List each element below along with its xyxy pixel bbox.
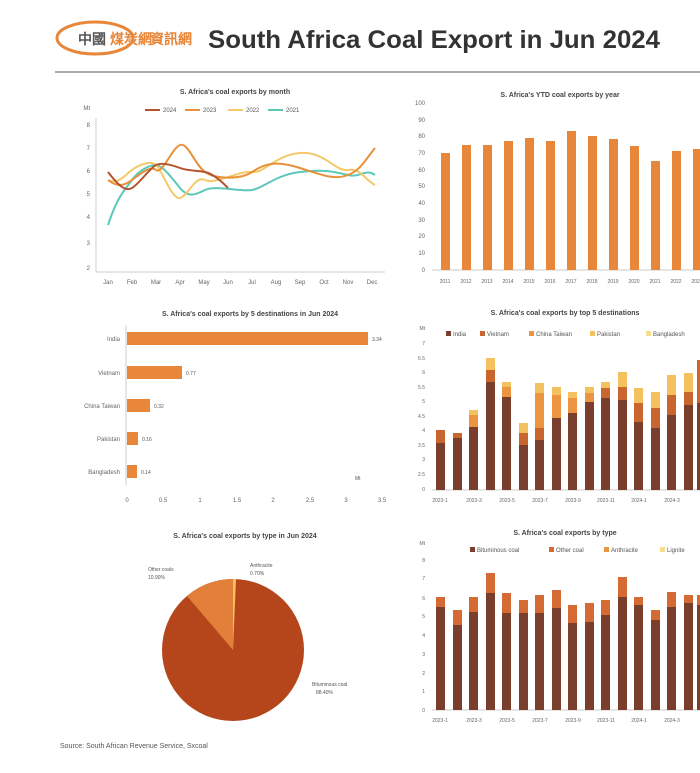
chart: top 5 destinations Jun 2024: 3.5 bbox=[378, 498, 387, 504]
chart: YTD by year: 80 bbox=[418, 134, 426, 140]
chart: top 5 destinations Jun 2024: 0.32 bbox=[154, 404, 164, 410]
logo bbox=[57, 22, 192, 54]
chart: line by month: 6 bbox=[87, 169, 91, 175]
chart: top 5 destinations Jun 2024 bbox=[84, 311, 387, 504]
chart: line by month: 2024 bbox=[163, 108, 177, 114]
logo: 煤炭網 bbox=[110, 31, 152, 47]
chart: top 5 destinations stacked: Bangladesh bbox=[653, 332, 685, 338]
chart: top 5 destinations stacked: Pakistan bbox=[597, 332, 620, 338]
chart: YTD by year: 2015 bbox=[523, 279, 535, 285]
chart: by type stacked: Other coal bbox=[556, 548, 584, 554]
chart: YTD by year: 2018 bbox=[586, 279, 598, 285]
chart: top 5 destinations stacked: 2023-5 bbox=[499, 498, 515, 504]
chart: pie by type: 10.90% bbox=[148, 575, 166, 581]
chart: top 5 destinations Jun 2024: Bangladesh bbox=[88, 470, 120, 476]
chart: line by month: 2022 bbox=[246, 108, 260, 114]
chart: YTD by year: 2022 bbox=[670, 279, 682, 285]
chart: by type stacked: 6 bbox=[422, 596, 425, 602]
chart: line by month: Feb bbox=[127, 280, 138, 286]
logo: 中國 bbox=[78, 31, 106, 47]
chart: top 5 destinations stacked: 4.5 bbox=[418, 414, 425, 420]
chart: top 5 destinations stacked: 4 bbox=[422, 428, 425, 434]
chart: line by month: S. Africa's coal exports by month bbox=[180, 89, 290, 96]
chart: top 5 destinations Jun 2024: 1 bbox=[198, 498, 202, 504]
chart: line by month: Nov bbox=[343, 280, 353, 286]
chart: YTD by year: 2013 bbox=[481, 279, 493, 285]
chart: by type stacked: Anthracite bbox=[611, 548, 639, 554]
chart: YTD by year: 100 bbox=[415, 101, 426, 107]
chart: YTD by year: 70 bbox=[418, 151, 426, 157]
chart: by type stacked: 2023-9 bbox=[565, 718, 581, 724]
chart: top 5 destinations stacked bbox=[418, 310, 700, 504]
chart: line by month: Jun bbox=[223, 280, 233, 286]
chart: top 5 destinations stacked: 0 bbox=[422, 487, 425, 493]
chart: YTD by year: 10 bbox=[418, 251, 426, 257]
chart: top 5 destinations stacked: 2023-9 bbox=[565, 498, 581, 504]
chart: line by month: Jan bbox=[103, 280, 113, 286]
chart: top 5 destinations Jun 2024: 3.34 bbox=[372, 337, 382, 343]
chart: line by month bbox=[83, 89, 385, 286]
chart: YTD by year: 2021 bbox=[649, 279, 661, 285]
chart: YTD by year: 30 bbox=[418, 218, 426, 224]
chart: line by month: Mar bbox=[151, 280, 161, 286]
chart: line by month: 5 bbox=[87, 192, 91, 198]
chart: top 5 destinations Jun 2024: Vietnam bbox=[98, 371, 120, 377]
chart: line by month: Apr bbox=[175, 280, 185, 286]
chart: top 5 destinations stacked: 7 bbox=[422, 341, 425, 347]
chart: by type stacked: 3 bbox=[422, 652, 425, 658]
chart: top 5 destinations stacked: 5 bbox=[422, 399, 425, 405]
chart: by type stacked: 2023-7 bbox=[532, 718, 548, 724]
chart: by type stacked: 1 bbox=[422, 689, 425, 695]
chart: top 5 destinations Jun 2024: 0 bbox=[125, 498, 129, 504]
chart: line by month: Sep bbox=[295, 280, 306, 286]
chart: line by month: 7 bbox=[87, 146, 91, 152]
chart: by type stacked bbox=[419, 530, 700, 724]
chart: YTD by year: 2014 bbox=[502, 279, 514, 285]
chart: line by month: 2023 bbox=[203, 108, 217, 114]
chart: top 5 destinations Jun 2024: 0.5 bbox=[159, 498, 168, 504]
chart: top 5 destinations Jun 2024: Pakistan bbox=[97, 437, 120, 443]
chart: top 5 destinations stacked: 6 bbox=[422, 370, 425, 376]
chart: by type stacked: 4 bbox=[422, 633, 425, 639]
chart: YTD by year: 2016 bbox=[544, 279, 556, 285]
chart: top 5 destinations Jun 2024: 2.5 bbox=[306, 498, 315, 504]
chart: line by month: 4 bbox=[87, 215, 91, 221]
chart: top 5 destinations stacked: 2023-3 bbox=[466, 498, 482, 504]
chart: pie by type: Other coals bbox=[148, 567, 174, 573]
chart: line by month: 8 bbox=[87, 123, 91, 129]
chart: top 5 destinations stacked: 2024-1 bbox=[631, 498, 647, 504]
chart: by type stacked: 7 bbox=[422, 576, 425, 582]
chart: pie by type bbox=[148, 533, 347, 721]
chart: pie by type: 0.70% bbox=[250, 571, 265, 577]
chart: pie by type: 88.40% bbox=[316, 690, 334, 696]
chart: pie by type: S. Africa's coal exports by type in Jun 2024 bbox=[173, 533, 317, 540]
source note: Source: South African Revenue Service, Sxcoal bbox=[60, 743, 208, 750]
chart: top 5 destinations Jun 2024: Mt bbox=[355, 476, 361, 482]
chart: by type stacked: 2023-5 bbox=[499, 718, 515, 724]
chart: YTD by year: 40 bbox=[418, 201, 426, 207]
chart: by type stacked: Lignite bbox=[667, 548, 685, 554]
title: South Africa Coal Export in Jun 2024 bbox=[208, 26, 660, 54]
chart: top 5 destinations Jun 2024: China Taiwan bbox=[84, 404, 120, 410]
chart: top 5 destinations stacked: S. Africa's coal exports by top 5 destinations bbox=[491, 310, 640, 317]
chart: YTD by year: 2011 bbox=[440, 279, 451, 285]
chart: top 5 destinations stacked: 6.5 bbox=[418, 356, 425, 362]
chart: top 5 destinations stacked: India bbox=[453, 332, 467, 338]
chart: YTD by year: 90 bbox=[418, 118, 426, 124]
chart: top 5 destinations Jun 2024: 1.5 bbox=[233, 498, 242, 504]
chart: top 5 destinations Jun 2024: India bbox=[107, 337, 121, 343]
chart: top 5 destinations Jun 2024: 0.16 bbox=[142, 437, 152, 443]
chart: YTD by year: 2020 bbox=[628, 279, 640, 285]
chart: line by month: Aug bbox=[271, 280, 281, 286]
chart: line by month: Jul bbox=[248, 280, 256, 286]
chart: top 5 destinations stacked: 2024-3 bbox=[664, 498, 680, 504]
chart: top 5 destinations stacked: 3.5 bbox=[418, 443, 425, 449]
chart: top 5 destinations Jun 2024: 0.14 bbox=[141, 470, 151, 476]
chart: top 5 destinations stacked: 3 bbox=[422, 457, 425, 463]
chart: top 5 destinations Jun 2024: 0.77 bbox=[186, 371, 196, 377]
chart: YTD by year: 2017 bbox=[565, 279, 577, 285]
chart: top 5 destinations Jun 2024: 3 bbox=[344, 498, 348, 504]
chart: YTD by year: 0 bbox=[422, 268, 426, 274]
chart: by type stacked: 2 bbox=[422, 671, 425, 677]
chart: line by month: Oct bbox=[319, 280, 329, 286]
chart: YTD by year: S. Africa's YTD coal exports by year bbox=[500, 92, 620, 99]
chart: line by month: 2021 bbox=[286, 108, 300, 114]
chart: top 5 destinations stacked: 2023-11 bbox=[597, 498, 615, 504]
chart: YTD by year: 2019 bbox=[607, 279, 619, 285]
chart: top 5 destinations stacked: 2.5 bbox=[418, 472, 425, 478]
chart: by type stacked: Mt bbox=[419, 541, 426, 547]
chart: YTD by year bbox=[415, 92, 700, 285]
chart: line by month: 2 bbox=[87, 266, 91, 272]
chart: by type stacked: 2023-1 bbox=[432, 718, 448, 724]
chart: line by month: Mt bbox=[83, 106, 90, 112]
chart: by type stacked: 5 bbox=[422, 614, 425, 620]
chart: by type stacked: 2024-3 bbox=[664, 718, 680, 724]
chart: top 5 destinations stacked: Vietnam bbox=[487, 332, 509, 338]
chart: by type stacked: 2023-3 bbox=[466, 718, 482, 724]
chart: top 5 destinations stacked: China Taiwan bbox=[536, 332, 572, 338]
chart: YTD by year: 2012 bbox=[460, 279, 472, 285]
logo: 資訊網 bbox=[150, 31, 192, 47]
chart: pie by type: Anthracite bbox=[250, 563, 273, 569]
chart: YTD by year: 60 bbox=[418, 168, 426, 174]
chart: line by month: May bbox=[198, 280, 210, 286]
chart: by type stacked: 8 bbox=[422, 558, 425, 564]
chart: by type stacked: S. Africa's coal exports by type bbox=[513, 530, 617, 537]
chart: top 5 destinations stacked: 5.5 bbox=[418, 385, 425, 391]
chart: top 5 destinations stacked: 2023-1 bbox=[432, 498, 448, 504]
chart: top 5 destinations Jun 2024: 2 bbox=[271, 498, 275, 504]
chart: YTD by year: 20 bbox=[418, 234, 426, 240]
chart: top 5 destinations Jun 2024: S. Africa's coal exports by 5 destinations in Jun 2024 bbox=[162, 311, 338, 318]
chart: pie by type: Bituminous coal bbox=[312, 682, 347, 688]
chart: by type stacked: 2023-11 bbox=[597, 718, 615, 724]
chart: top 5 destinations stacked: Mt bbox=[419, 326, 426, 332]
chart: line by month: Dec bbox=[367, 280, 377, 286]
chart: by type stacked: 2024-1 bbox=[631, 718, 647, 724]
chart: by type stacked: Bituminous coal bbox=[477, 548, 519, 554]
chart: top 5 destinations stacked: 2023-7 bbox=[532, 498, 548, 504]
chart: YTD by year: 50 bbox=[418, 184, 426, 190]
chart: by type stacked: 0 bbox=[422, 708, 425, 714]
chart: line by month: 3 bbox=[87, 241, 91, 247]
